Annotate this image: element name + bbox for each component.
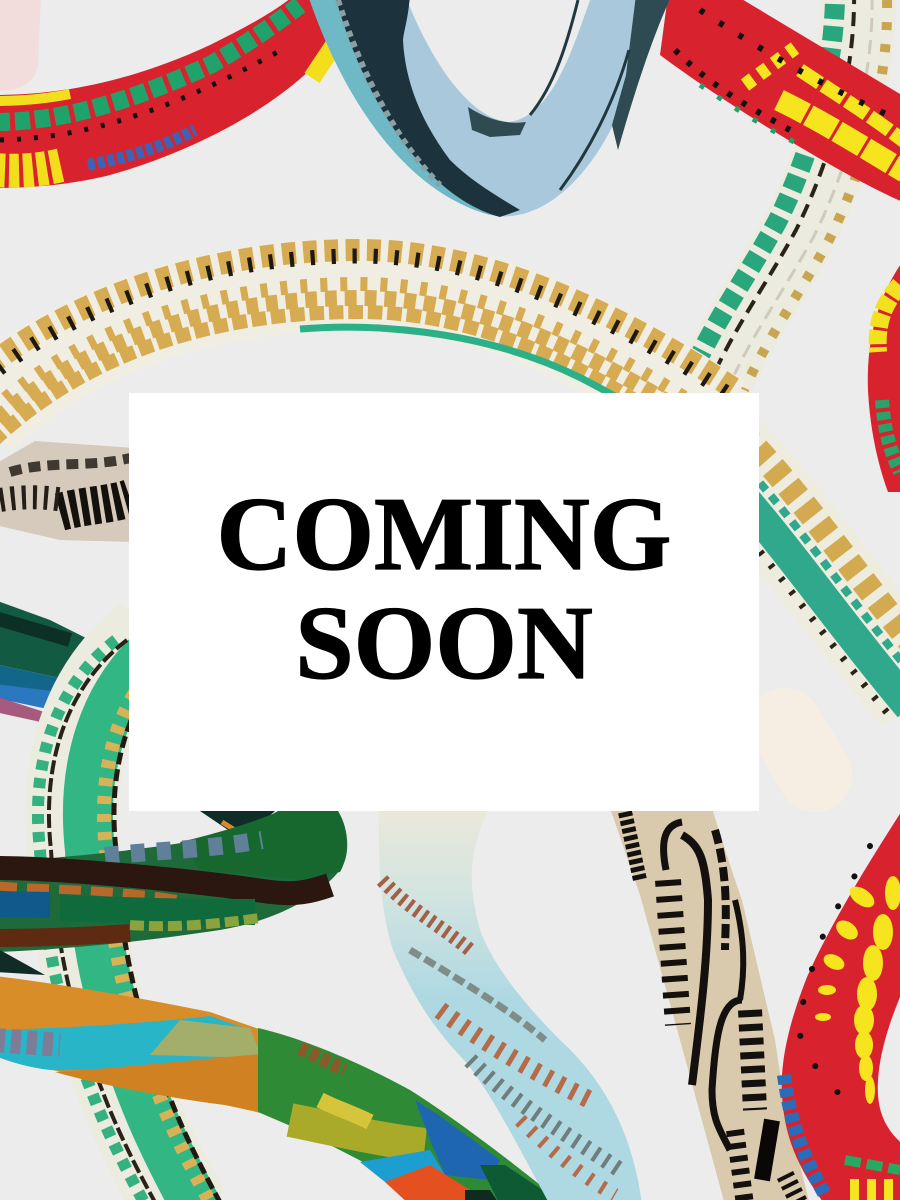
red and yellow snake right edge — [868, 258, 900, 492]
red and yellow snake bottom right — [782, 806, 900, 1200]
tan and green snake right side — [694, 432, 900, 721]
orange and green snake bottom left — [0, 976, 565, 1200]
beige zebra snake left — [0, 441, 135, 542]
pink blob top left — [0, 0, 41, 91]
tan and white snake main arc — [0, 250, 739, 446]
title: coming soon: COMING — [217, 475, 671, 592]
green and white snake upper right — [692, 0, 887, 390]
blue metallic snake top center — [308, 0, 672, 217]
title: coming soon — [217, 475, 671, 701]
red snake top left — [0, 0, 336, 188]
cream blob right — [785, 725, 815, 775]
title: coming soon: SOON — [295, 584, 593, 701]
pale blue floral snake center bottom — [379, 808, 642, 1200]
black and beige zebra snake bottom — [610, 808, 810, 1200]
dark green and orange patch at card edge — [200, 811, 275, 838]
red snake top right — [660, 0, 900, 203]
green ring snake left — [38, 640, 227, 1200]
dark multicolour snake lower left — [0, 811, 347, 975]
dark green snake left — [0, 600, 110, 728]
white title card — [129, 393, 759, 811]
